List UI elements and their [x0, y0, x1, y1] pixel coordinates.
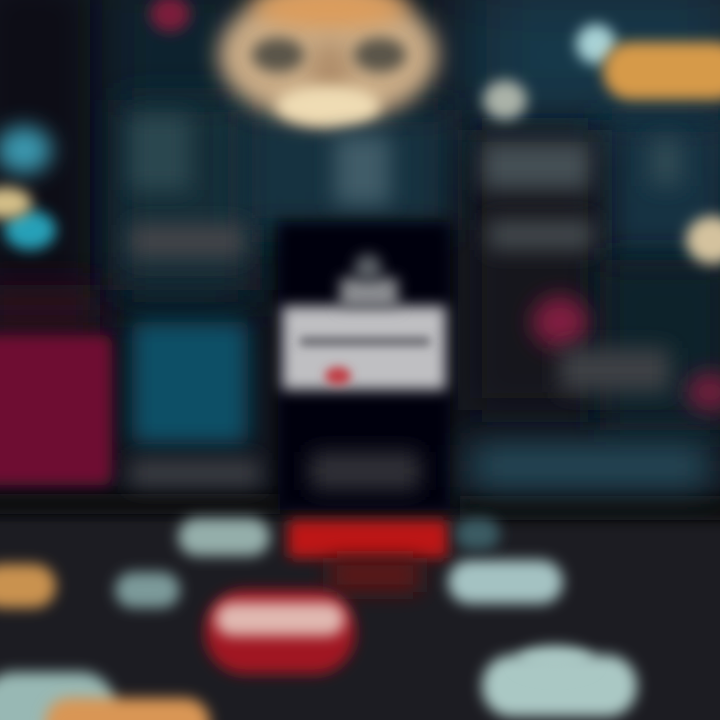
teal shelf right	[470, 445, 710, 487]
token: pale top	[178, 518, 270, 556]
panel: teal block	[132, 322, 248, 444]
token: teal small	[455, 518, 500, 550]
token: pale bottom left	[0, 672, 115, 720]
floor	[0, 494, 720, 720]
red button bar	[288, 520, 448, 592]
right edge pale badge	[686, 216, 720, 264]
text block: lower left caption	[130, 460, 260, 486]
panel: maroon block	[0, 335, 112, 485]
token: orange left	[0, 564, 56, 608]
icon: left blue badge	[0, 126, 56, 250]
pink badges right	[532, 296, 720, 412]
text block: left upper	[130, 115, 245, 257]
panel: top face illustration	[218, 0, 438, 205]
top right pill	[483, 24, 720, 120]
panel: central dark column	[278, 222, 450, 510]
token: orange bottom	[45, 698, 210, 720]
heading: central white text	[282, 254, 446, 390]
token: pale small	[115, 572, 180, 608]
text block: central caption	[310, 452, 420, 490]
icon: pink spot top left	[150, 0, 190, 32]
floor tokens	[0, 518, 637, 720]
token: pale large right	[482, 646, 637, 717]
token: red and white	[205, 590, 355, 674]
token: pale right	[448, 560, 563, 604]
text block: right upper	[482, 138, 682, 250]
